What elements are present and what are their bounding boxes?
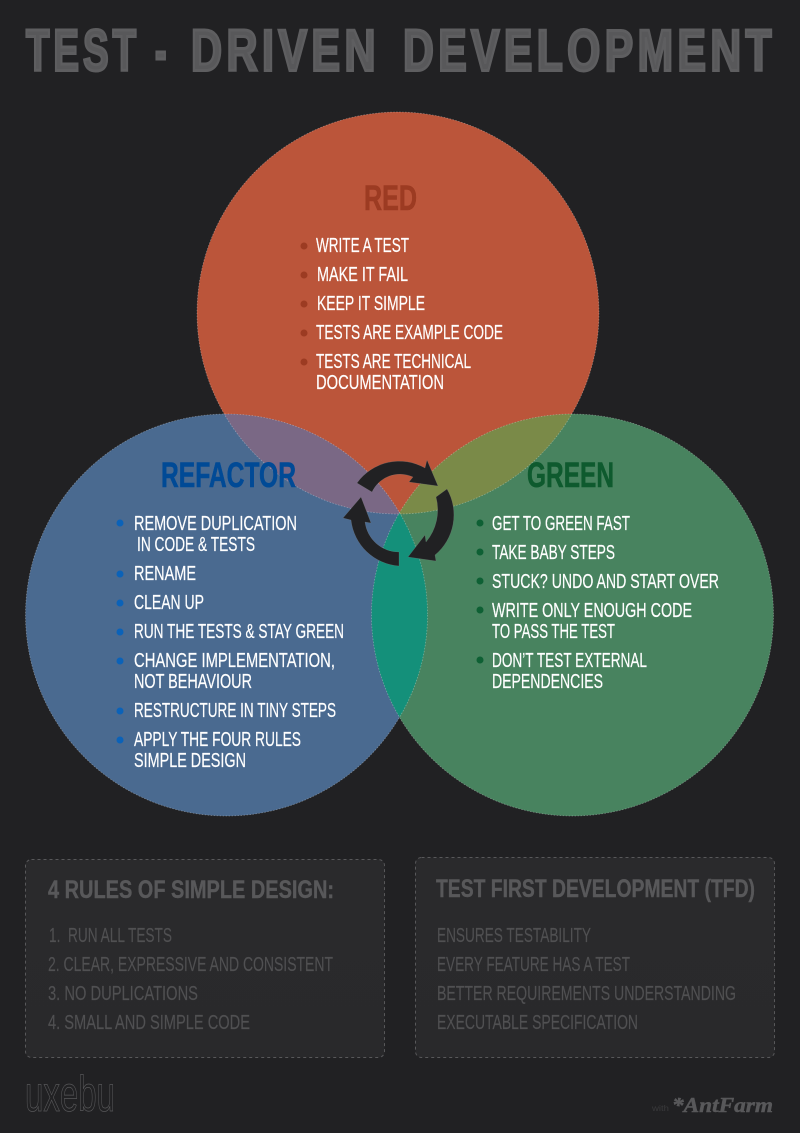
list: 4 rules: 3. NO DUPLICATIONS xyxy=(48,983,198,1005)
list: red steps: TESTS ARE TECHNICAL xyxy=(316,351,471,373)
heading: red: RED xyxy=(364,179,417,218)
circle outlines xyxy=(26,112,774,816)
panel: test first development xyxy=(416,858,774,1058)
list: refactor steps: RESTRUCTURE IN TINY STEPS xyxy=(134,700,336,722)
list: 4 rules xyxy=(48,925,333,1034)
logo: antfarm: *AntFarm xyxy=(672,1093,773,1117)
title xyxy=(26,18,776,84)
list: refactor steps: CLEAN UP xyxy=(134,592,204,614)
list: red steps: DOCUMENTATION xyxy=(316,372,444,394)
list: red steps: WRITE A TEST xyxy=(316,235,409,257)
list: refactor steps: APPLY THE FOUR RULES xyxy=(134,729,301,751)
list: green steps: DEPENDENCIES xyxy=(492,671,603,693)
list: refactor steps: NOT BEHAVIOUR xyxy=(134,671,252,693)
circle: refactor xyxy=(26,414,428,816)
list: tfd benefits xyxy=(437,925,736,1034)
list: refactor steps: SIMPLE DESIGN xyxy=(134,750,246,772)
list: red steps: MAKE IT FAIL xyxy=(317,264,408,286)
list: refactor steps: RUN THE TESTS & STAY GREEN xyxy=(134,621,344,643)
list: refactor steps: REMOVE DUPLICATION xyxy=(134,513,297,535)
panel: green text xyxy=(476,456,719,693)
heading: refactor: REFACTOR xyxy=(161,456,296,495)
title: DRIVEN xyxy=(191,18,380,84)
list: 4 rules: 1. RUN ALL TESTS xyxy=(49,925,172,947)
list: refactor steps: IN CODE & TESTS xyxy=(137,534,255,556)
list: red steps xyxy=(300,235,503,394)
heading: green: GREEN xyxy=(527,456,614,495)
list: refactor steps xyxy=(116,513,344,772)
logo: uxebu: uxebu xyxy=(25,1066,115,1122)
list: refactor steps: RENAME xyxy=(134,563,196,585)
list: tfd benefits: EXECUTABLE SPECIFICATION xyxy=(437,1012,638,1034)
panel: red text xyxy=(300,179,503,394)
overlap: red and green xyxy=(398,414,572,514)
panel: 4 rules of simple design xyxy=(26,860,384,1058)
circle: green xyxy=(372,414,774,816)
list: tfd benefits: ENSURES TESTABILITY xyxy=(437,925,591,947)
list: tfd benefits: EVERY FEATURE HAS A TEST xyxy=(437,954,630,976)
list: red steps: KEEP IT SIMPLE xyxy=(317,293,425,315)
icon: cycle arrows xyxy=(343,460,454,566)
logo: antfarm: with xyxy=(651,1104,669,1113)
overlap: red and refactor xyxy=(224,414,400,514)
title: - xyxy=(155,18,170,84)
list: 4 rules: 4. SMALL AND SIMPLE CODE xyxy=(48,1012,250,1034)
list: refactor steps: CHANGE IMPLEMENTATION, xyxy=(134,650,335,672)
list: green steps: DON’T TEST EXTERNAL xyxy=(492,650,647,672)
list: red steps: TESTS ARE EXAMPLE CODE xyxy=(316,322,503,344)
list: green steps: WRITE ONLY ENOUGH CODE xyxy=(492,600,692,622)
list: green steps: TAKE BABY STEPS xyxy=(492,542,615,564)
circle: red xyxy=(197,112,599,514)
heading: 4 rules: 4 RULES OF SIMPLE DESIGN: xyxy=(48,876,334,904)
list: 4 rules: 2. CLEAR, EXPRESSIVE AND CONSISTENT xyxy=(48,954,333,976)
list: green steps xyxy=(476,513,719,693)
panel: refactor text xyxy=(116,456,344,772)
overlap: refactor and green xyxy=(372,513,428,717)
title: TEST xyxy=(26,18,140,84)
list: green steps: GET TO GREEN FAST xyxy=(492,513,630,535)
list: green steps: TO PASS THE TEST xyxy=(492,621,615,643)
